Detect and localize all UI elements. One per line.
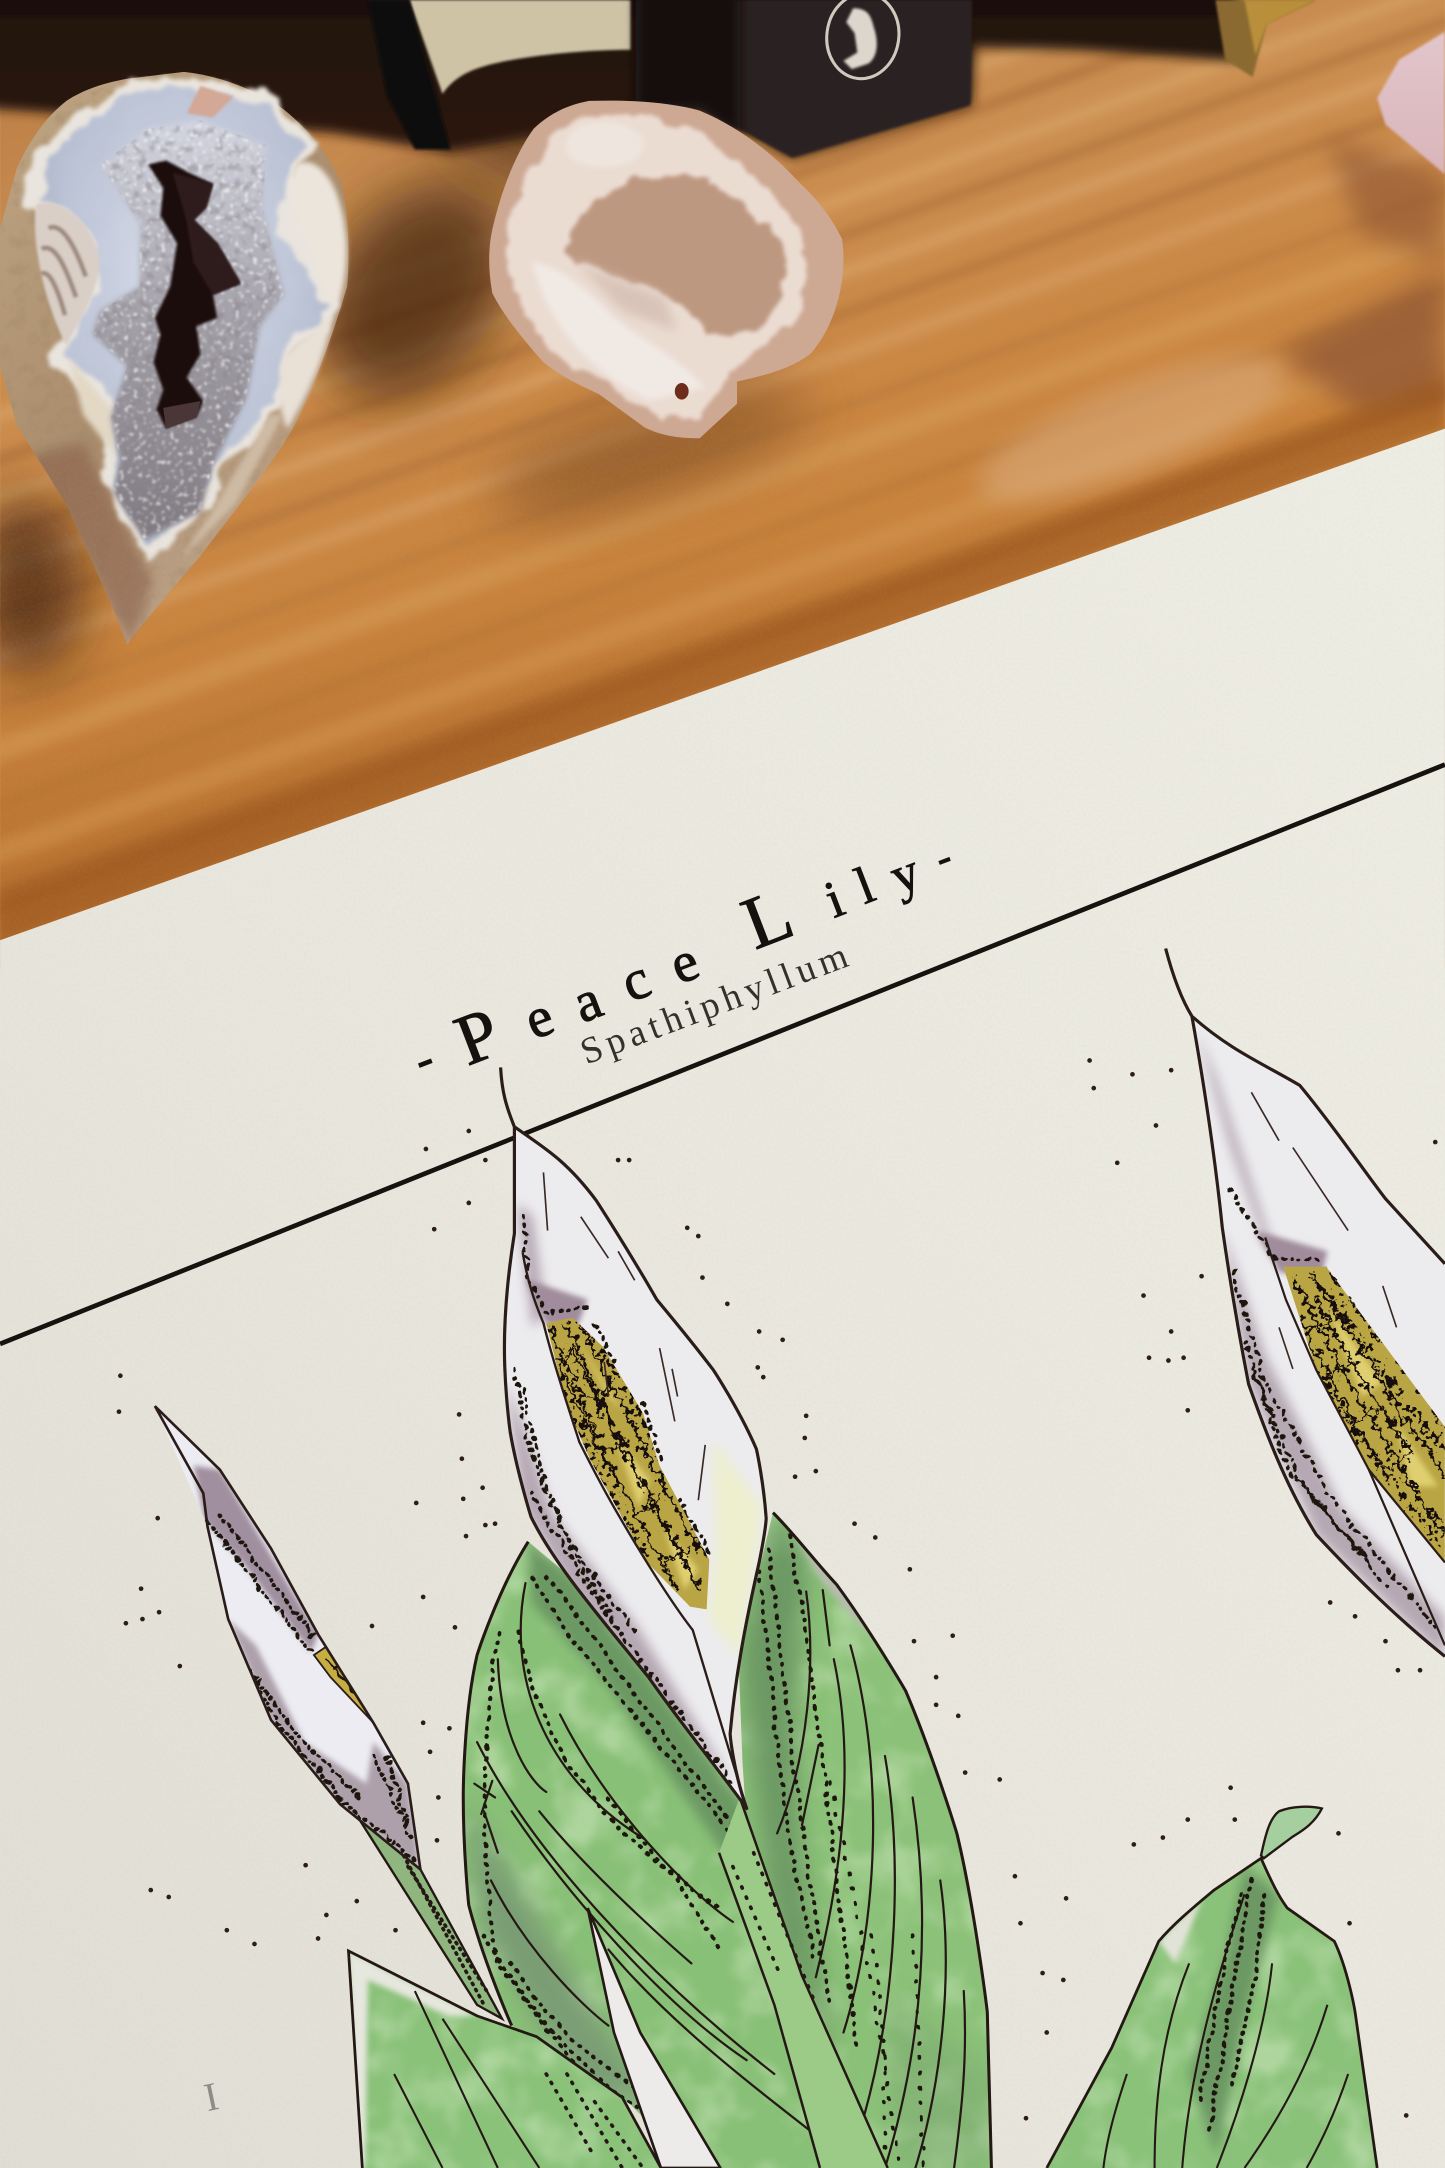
striped pale patches xyxy=(35,203,100,346)
agate blue band xyxy=(37,86,329,546)
title: Peace Lily: L xyxy=(731,872,804,966)
title: Peace Lily: - xyxy=(406,1030,441,1087)
dark books at the top xyxy=(0,0,1316,159)
icon: puffin badge xyxy=(821,0,904,83)
title: Peace Lily: y xyxy=(882,842,928,906)
leaf: lower right xyxy=(1037,1807,1383,2168)
wooden table xyxy=(0,0,1445,968)
geode cavity xyxy=(148,160,241,429)
flower: small left bud xyxy=(155,1406,502,2019)
spadix small xyxy=(312,1646,372,1722)
spadix xyxy=(546,1318,710,1610)
title: Peace Lily: e xyxy=(661,929,707,997)
book: black spine xyxy=(368,0,451,149)
geode hollow xyxy=(571,178,787,335)
title: Peace Lily: c xyxy=(613,947,659,1015)
title: Peace Lily: a xyxy=(564,967,610,1035)
leaf tip xyxy=(1261,1807,1322,1858)
crystal druse xyxy=(93,120,284,539)
leaf: large right xyxy=(733,1507,996,2168)
title: Peace Lily: P xyxy=(444,992,510,1081)
title: Peace Lily: e xyxy=(516,984,562,1052)
blue agate geode xyxy=(0,72,350,644)
leaf: large left xyxy=(462,1540,819,2168)
divider line xyxy=(0,765,1445,1344)
agate white band xyxy=(22,76,340,563)
title: Peace Lily: i xyxy=(817,870,852,929)
book: cream pages xyxy=(409,0,631,94)
flower: right spathe xyxy=(1166,948,1445,1659)
flower: main spathe xyxy=(501,1067,766,1809)
leaf: bottom left xyxy=(346,1950,664,2168)
pink crystal spot xyxy=(187,86,234,118)
title: Peace Lily: - xyxy=(928,833,958,881)
white spathe tip at the bottom xyxy=(588,1908,720,2168)
pink quartz crystal xyxy=(1377,32,1445,174)
title: Peace Lily xyxy=(406,833,958,1087)
title: Peace Lily: l xyxy=(848,856,882,915)
spadix right xyxy=(1283,1266,1445,1561)
book: charcoal cover xyxy=(636,0,972,158)
stem band xyxy=(719,1797,888,2168)
peach agate geode xyxy=(489,101,843,438)
ink speckle dots xyxy=(119,1060,1435,2118)
small roman numeral I: I xyxy=(200,2073,222,2120)
book: yellow corner xyxy=(1215,0,1316,77)
subtitle: Spathiphyllum: Spathiphyllum xyxy=(575,935,854,1073)
